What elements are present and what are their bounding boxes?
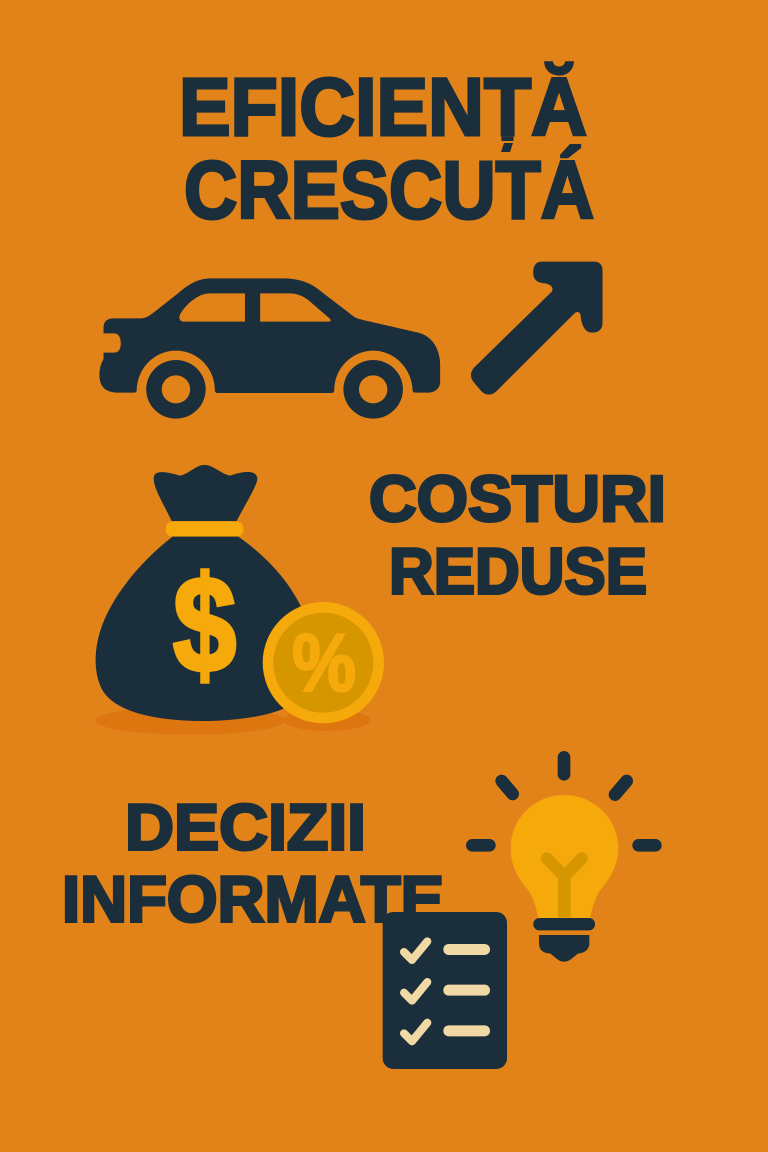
icon: checklist: [383, 912, 507, 1069]
heading: costuri reduse: [369, 462, 666, 608]
icon: arrow up right: [471, 262, 603, 395]
icon: light bulb: [472, 757, 655, 962]
infographic: [64, 61, 664, 1069]
icon: car: [99, 278, 440, 419]
title: EFICIENȚĂ: [179, 62, 587, 153]
title: CRESCUTÁ: [184, 145, 594, 236]
heading: costuri reduse: REDUSE: [389, 534, 647, 608]
heading: costuri reduse: COSTURI: [369, 462, 666, 535]
heading: decizii informate: INFORMATE: [62, 862, 444, 936]
icon: money bag with percent coin: $: [173, 548, 236, 701]
heading: decizii informate: DECIZII: [125, 790, 366, 864]
icon: money bag with percent coin: [95, 465, 384, 735]
icon: money bag with percent coin: %: [292, 618, 356, 709]
title: [179, 62, 594, 236]
heading: decizii informate: [62, 790, 444, 936]
